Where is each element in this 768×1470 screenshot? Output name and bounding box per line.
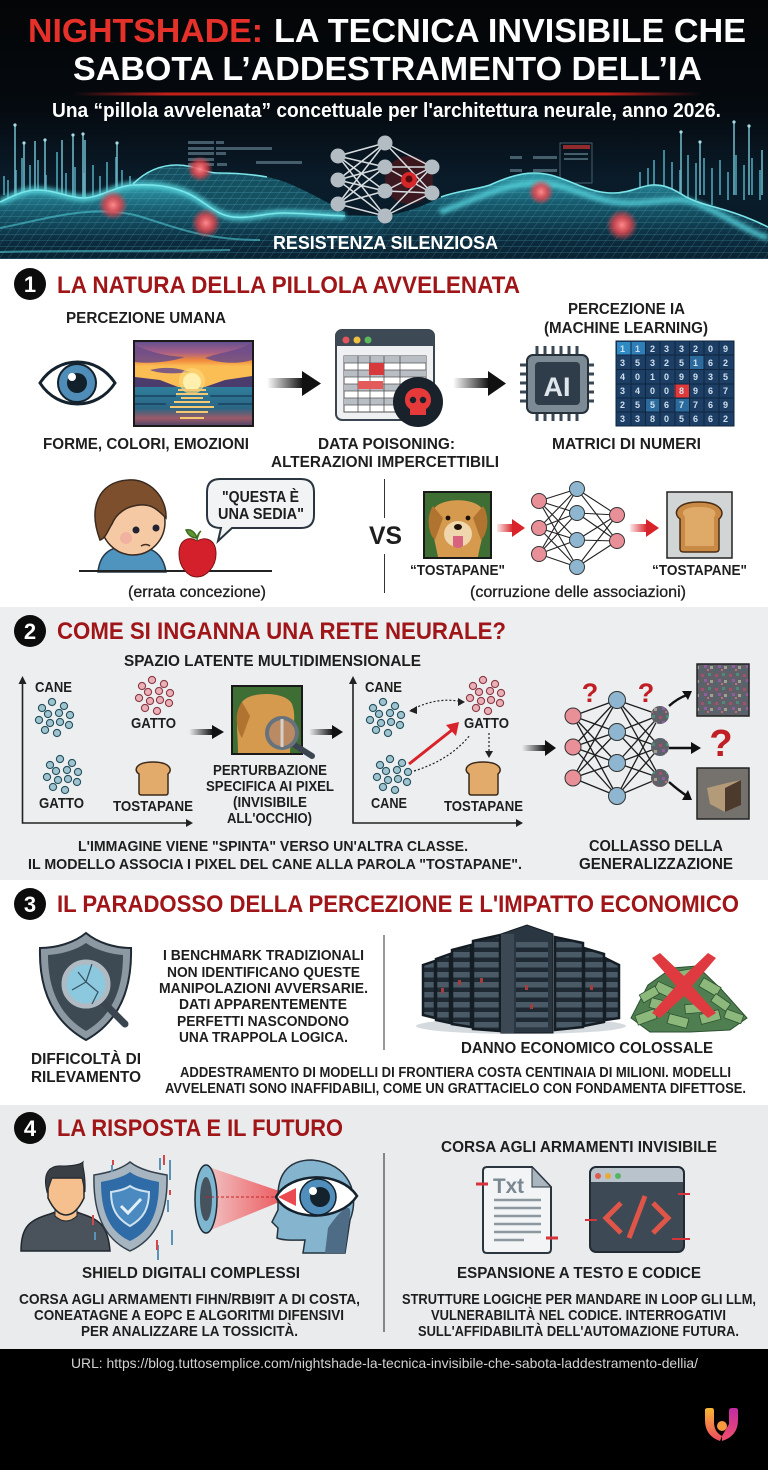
section number 2 [14, 615, 46, 647]
captions: tostapane: “TOSTAPANE" [652, 562, 747, 579]
text: benchmarks: UNA TRAPPOLA LOGICA. [179, 1030, 348, 1046]
image: dog with magnifier [232, 686, 312, 756]
chart: latent space after: GATTO [464, 715, 509, 732]
chart: number matrix: 35325162 [620, 358, 728, 368]
image: noise output [697, 664, 749, 716]
panel: section 4 [0, 1105, 768, 1349]
image: distorted cube output [697, 768, 749, 819]
text: explanation: L'IMMAGINE VIENE "SPINTA" VERSO UN'ALTRA CLASSE. [78, 838, 468, 855]
speech bubble: UNA SEDIA" [218, 506, 304, 523]
poison glow markers [98, 156, 638, 241]
label: AI perception: PERCEZIONE IA [568, 301, 685, 318]
icon: text document: Txt [493, 1175, 524, 1198]
text: expansion description: VULNERABILITÀ NEL CODICE. INTERROGATIVI [431, 1307, 726, 1324]
text: benchmarks: I BENCHMARK TRADIZIONALI [163, 948, 364, 964]
heading: LA RISPOSTA E IL FUTURO [57, 1115, 343, 1142]
text: shields description [19, 1291, 360, 1340]
heading: COME SI INGANNA UNA RETE NEURALE? [57, 618, 506, 645]
text: explanation: IL MODELLO ASSOCIA I PIXEL DEL CANE ALLA PAROLA "TOSTAPANE". [28, 856, 522, 873]
icon: eye [40, 362, 115, 404]
label: AI perception: (MACHINE LEARNING) [544, 320, 708, 337]
section number 2: 2 [24, 619, 36, 644]
icon: collapsing neural network [565, 692, 669, 804]
caption: matrices: MATRICI DI NUMERI [552, 436, 701, 453]
captions: tostapane [410, 562, 747, 579]
caption: misconception: (errata concezione) [128, 584, 266, 601]
caption: pixel perturbation: (INVISIBILE [233, 795, 307, 811]
question marks: ? [709, 723, 733, 765]
label: human perception: PERCEZIONE UMANA [66, 310, 226, 327]
label: AI perception [544, 301, 708, 337]
caption: data poisoning: DATA POISONING: [318, 436, 455, 453]
panel: section 3 [0, 880, 768, 1105]
icon: poisoned data table [336, 330, 443, 427]
caption: corrupted associations: (corruzione delle associazioni) [470, 584, 686, 601]
red arrow [497, 519, 525, 537]
chart: number matrix: 33805662 [620, 414, 728, 424]
chart: number matrix: 25567769 [620, 400, 728, 410]
text: generalisation collapse [579, 838, 733, 873]
icon: text document [476, 1167, 558, 1253]
title: NIGHTSHADE: [28, 13, 263, 50]
arrow [453, 371, 506, 396]
captions: tostapane: “TOSTAPANE" [410, 562, 505, 579]
question marks [582, 678, 733, 765]
chart: number matrix: 11233209 [620, 344, 728, 354]
chart: latent space before: TOSTAPANE [113, 798, 193, 815]
icon: cyber head with eye [272, 1160, 357, 1253]
icon: AI chip [520, 346, 594, 421]
chart bars background right [640, 120, 762, 205]
output arrows [669, 691, 701, 800]
chart: latent space before: CANE [35, 679, 72, 696]
caption: forms: FORME, COLORI, EMOZIONI [43, 436, 249, 453]
section number 4: 4 [24, 1116, 37, 1141]
illustration: boy with apple [79, 480, 272, 577]
arrow [309, 725, 343, 739]
wave mesh left [0, 165, 384, 259]
text: explanation [28, 838, 522, 873]
image: sunset [134, 341, 253, 426]
chart: latent space after: TOSTAPANE [444, 798, 523, 815]
icon: neural network with poisoned node [330, 136, 440, 224]
text: generalisation collapse: COLLASSO DELLA [589, 838, 723, 855]
section number 4 [14, 1112, 46, 1144]
icon: person [21, 1162, 110, 1251]
caption: data poisoning [271, 436, 499, 471]
icon: neural network [532, 482, 624, 574]
title [28, 13, 746, 88]
panel: footer [0, 1349, 768, 1470]
panel: section 2 [0, 607, 768, 880]
title: SABOTA L’ADDESTRAMENTO DELL’IA [73, 51, 702, 88]
heading: LA NATURA DELLA PILLOLA AVVELENATA [57, 272, 520, 299]
caption: detection difficulty: RILEVAMENTO [31, 1069, 141, 1086]
icon: laser lens to eye [195, 1165, 294, 1233]
text: benchmarks [159, 948, 368, 1046]
icon: money pile crossed out [631, 953, 747, 1032]
chart: latent space after [349, 676, 523, 827]
caption: economic damage: DANNO ECONOMICO COLOSSALE [461, 1040, 713, 1057]
text: benchmarks: PERFETTI NASCONDONO [177, 1014, 349, 1030]
speech bubble: "QUESTA È [222, 487, 299, 506]
header caption: RESISTENZA SILENZIOSA [273, 232, 498, 253]
icon: digital shield [93, 1155, 172, 1260]
caption: pixel perturbation: PERTURBAZIONE [213, 763, 327, 779]
icon: server racks [416, 925, 626, 1034]
section number 1 [14, 268, 46, 300]
text: shields description: CONEATAGNE A EOPC E ALGORITMI DIFENSIVI [34, 1307, 344, 1324]
text: cost [165, 1065, 746, 1097]
icon: logo [705, 1408, 738, 1441]
caption: detection difficulty [31, 1049, 141, 1086]
chart: latent space after: CANE [365, 679, 402, 696]
chart bars background left [4, 123, 130, 205]
icon: AI chip: AI [544, 372, 570, 402]
chart: latent space before [18, 676, 193, 827]
text: benchmarks: DATI APPARENTEMENTE [179, 997, 347, 1013]
chart: latent space before: GATTO [39, 795, 84, 812]
icon: shield with cracked magnifier [40, 933, 131, 1040]
question marks: ? [582, 678, 598, 708]
caption: shields: SHIELD DIGITALI COMPLESSI [82, 1265, 300, 1282]
text: shields description: PER ANALIZZARE LA TOSSICITÀ. [81, 1323, 298, 1340]
arrow [189, 725, 224, 739]
chart: latent space before: GATTO [131, 715, 176, 732]
image: toast [667, 492, 732, 558]
speech bubble [207, 479, 314, 541]
chart: latent space after: CANE [371, 795, 407, 812]
VS label: VS [369, 522, 402, 550]
heading: invisible arms race: CORSA AGLI ARMAMENTI INVISIBILE [441, 1139, 717, 1156]
chart: number matrix [616, 341, 734, 426]
title: LA TECNICA INVISIBILE CHE [274, 13, 746, 50]
text: benchmarks: NON IDENTIFICANO QUESTE [167, 965, 360, 981]
section number 3 [14, 888, 46, 920]
text: benchmarks: MANIPOLAZIONI AVVERSARIE. [159, 981, 368, 997]
text: shields description: CORSA AGLI ARMAMENTI FIHN/RBI9IT A DI COSTA, [19, 1291, 360, 1308]
chart: number matrix: 40109935 [620, 372, 728, 382]
arrow [267, 371, 321, 396]
source URL: URL: https://blog.tuttosemplice.com/nightshade-la-tecnica-invisibile-che-sabota-laddestramento-dellia/ [71, 1355, 698, 1371]
text: expansion description [402, 1291, 756, 1340]
icon: code window [585, 1167, 690, 1252]
question marks: ? [638, 678, 654, 708]
label: latent space: SPAZIO LATENTE MULTIDIMENSIONALE [124, 653, 421, 670]
section number 3: 3 [24, 892, 36, 917]
code snippets background [188, 141, 592, 183]
caption: pixel perturbation [206, 763, 334, 827]
arrow [522, 740, 556, 756]
image: dog [424, 492, 491, 558]
text: generalisation collapse: GENERALIZZAZIONE [579, 856, 733, 873]
caption: pixel perturbation: ALL'OCCHIO) [227, 811, 312, 827]
wave mesh right [384, 173, 768, 259]
caption: data poisoning: ALTERAZIONI IMPERCETTIBILI [271, 454, 499, 471]
caption: detection difficulty: DIFFICOLTÀ DI [31, 1049, 141, 1068]
subtitle: Una “pillola avvelenata” concettuale per l'architettura neurale, anno 2026. [52, 100, 721, 122]
section number 1: 1 [24, 272, 36, 297]
panel: section 1 [0, 259, 768, 607]
caption: text and code: ESPANSIONE A TESTO E CODICE [457, 1265, 701, 1282]
caption: pixel perturbation: SPECIFICA AI PIXEL [206, 779, 334, 795]
chart: number matrix: 34008967 [620, 386, 728, 396]
panel: header [0, 0, 768, 259]
red arrow [630, 519, 659, 537]
